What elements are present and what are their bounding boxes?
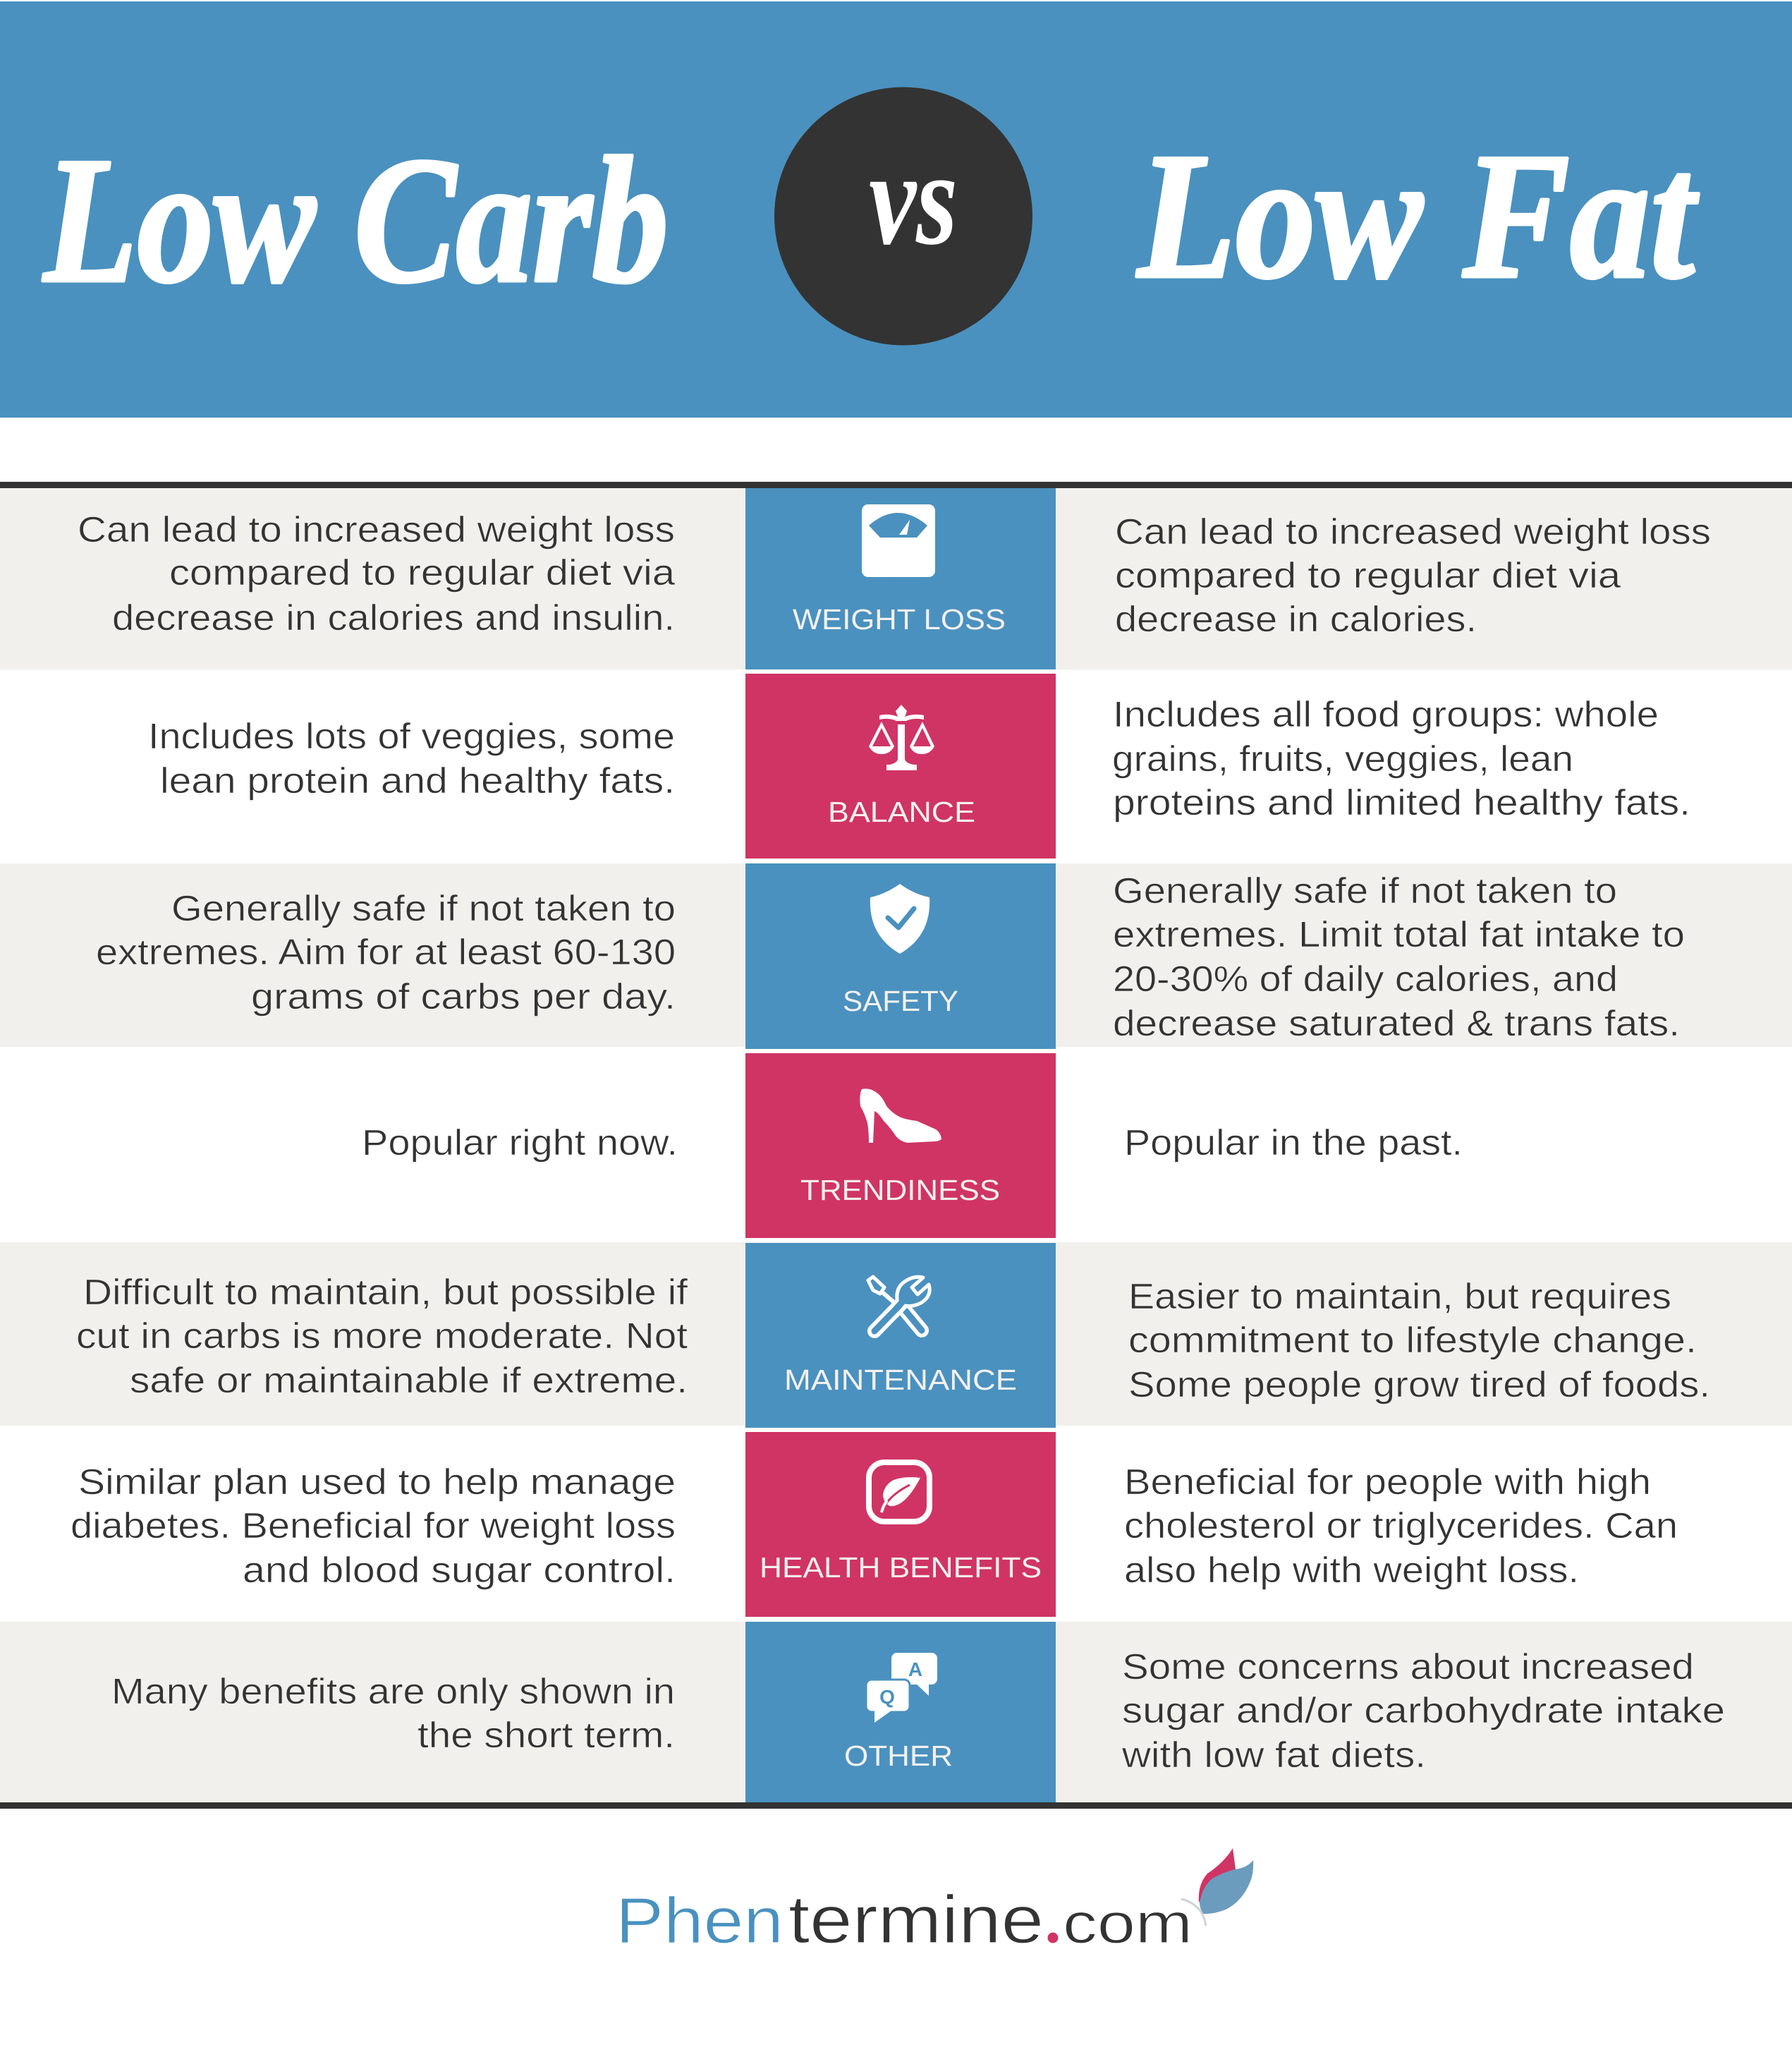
- header banner: [0, 1, 1792, 418]
- logo wordmark: [616, 1882, 1193, 1958]
- label: weight loss: WEIGHT LOSS: [793, 603, 1006, 636]
- low carb text: safety: extremes. Aim for at least 60-130: [96, 932, 676, 972]
- low carb text: weight loss: Can lead to increased weight loss: [78, 509, 675, 550]
- low fat text: maintenance: commitment to lifestyle change.: [1128, 1320, 1697, 1360]
- low carb text: health benefits: diabetes. Beneficial for weight loss: [71, 1505, 676, 1546]
- low fat text: other: [1121, 1646, 1725, 1775]
- low fat text: weight loss: Can lead to increased weight loss: [1115, 511, 1711, 552]
- low carb text: safety: grams of carbs per day.: [251, 976, 676, 1017]
- icon: question and answer bubbles: [866, 1653, 937, 1723]
- label: trendiness: TRENDINESS: [800, 1174, 1000, 1206]
- low carb text: balance: lean protein and healthy fats.: [160, 760, 675, 801]
- category tile: trendiness: [745, 1053, 1056, 1238]
- label: balance: BALANCE: [828, 796, 975, 828]
- low fat text: trendiness: Popular in the past.: [1124, 1122, 1463, 1163]
- category tile: weight loss: [745, 488, 1056, 669]
- logo wordmark: com: [1063, 1892, 1193, 1955]
- low carb text: weight loss: decrease in calories and insulin.: [112, 597, 675, 638]
- low carb text: weight loss: [78, 509, 676, 638]
- low fat text: safety: decrease saturated & trans fats.: [1113, 1003, 1680, 1043]
- vs badge: vs: [869, 125, 958, 273]
- label: health benefits: HEALTH BENEFITS: [760, 1551, 1042, 1584]
- low carb text: safety: [96, 888, 676, 1017]
- icon: leaf in rounded square: [869, 1462, 929, 1522]
- title: Low Carb: Low Carb: [42, 121, 669, 320]
- category tile: balance: [745, 674, 1056, 858]
- low fat text: balance: Includes all food groups: whole: [1113, 694, 1659, 734]
- icon: wrench and screwdriver: [868, 1277, 929, 1331]
- low fat text: safety: 20-30% of daily calories, and: [1113, 959, 1618, 999]
- row: safety: [0, 863, 1792, 1049]
- logo wordmark: Phen: [616, 1885, 784, 1957]
- logo butterfly: [1181, 1848, 1253, 1926]
- low carb text: balance: [148, 716, 675, 801]
- row: weight loss: [0, 488, 1792, 669]
- low fat text: health benefits: also help with weight loss.: [1124, 1550, 1579, 1590]
- category tile: other: [745, 1622, 1056, 1802]
- low carb text: health benefits: and blood sugar control.: [243, 1550, 676, 1590]
- row: trendiness: [362, 1053, 1463, 1238]
- low fat text: maintenance: Easier to maintain, but requires: [1128, 1276, 1671, 1316]
- low fat text: safety: Generally safe if not taken to: [1113, 870, 1617, 911]
- low fat text: balance: proteins and limited healthy fats.: [1113, 782, 1690, 823]
- vs badge: [774, 87, 1032, 346]
- low carb text: safety: Generally safe if not taken to: [171, 888, 676, 928]
- low fat text: other: Some concerns about increased: [1122, 1646, 1694, 1687]
- low fat text: safety: [1113, 870, 1685, 1043]
- category tile: maintenance: [745, 1243, 1056, 1428]
- label: safety: SAFETY: [843, 985, 958, 1017]
- icon: shield with check: [870, 884, 929, 954]
- icon: balance scales: [869, 705, 934, 770]
- top rule: [0, 482, 1792, 488]
- low carb text: other: [111, 1671, 675, 1755]
- low carb text: health benefits: [71, 1462, 676, 1590]
- low carb text: maintenance: [76, 1272, 688, 1400]
- row: balance: [148, 674, 1690, 858]
- icon: high heel shoe: [860, 1088, 941, 1143]
- title: Low Fat: Low Fat: [1136, 116, 1699, 316]
- low fat text: balance: grains, fruits, veggies, lean: [1112, 739, 1573, 779]
- low carb text: maintenance: Difficult to maintain, but possible if: [83, 1272, 688, 1312]
- label: maintenance: MAINTENANCE: [784, 1364, 1017, 1396]
- low carb text: weight loss: compared to regular diet via: [169, 552, 676, 593]
- category tile: safety: [745, 863, 1056, 1049]
- low fat text: weight loss: compared to regular diet via: [1115, 555, 1621, 595]
- logo: Phentermine.com: [616, 1848, 1253, 1958]
- bottom rule: [0, 1802, 1792, 1809]
- row: health benefits: [71, 1432, 1678, 1617]
- low fat text: balance: [1112, 694, 1690, 823]
- low fat text: weight loss: [1115, 511, 1711, 639]
- low carb text: maintenance: cut in carbs is more moderate. Not: [76, 1316, 688, 1356]
- low fat text: safety: extremes. Limit total fat intake to: [1113, 914, 1685, 954]
- low fat text: health benefits: cholesterol or triglycerides. Can: [1124, 1505, 1678, 1546]
- row: maintenance: [0, 1242, 1792, 1428]
- low fat text: other: with low fat diets.: [1121, 1735, 1426, 1775]
- low fat text: weight loss: decrease in calories.: [1115, 599, 1477, 639]
- icon: question and answer bubbles: Q: [879, 1686, 895, 1708]
- row: other: [0, 1622, 1792, 1802]
- low carb text: maintenance: safe or maintainable if extreme.: [130, 1360, 688, 1400]
- logo wordmark: termine: [788, 1882, 1044, 1958]
- low fat text: maintenance: [1128, 1276, 1710, 1404]
- icon: bathroom scale: [862, 504, 935, 577]
- icon: question and answer bubbles: A: [908, 1658, 922, 1680]
- low fat text: health benefits: Beneficial for people with high: [1124, 1462, 1651, 1502]
- low carb text: trendiness: Popular right now.: [362, 1122, 678, 1163]
- category tile: health benefits: [745, 1432, 1056, 1617]
- low fat text: maintenance: Some people grow tired of foods.: [1128, 1364, 1710, 1404]
- low carb text: other: the short term.: [417, 1715, 675, 1755]
- low carb text: health benefits: Similar plan used to help manage: [78, 1462, 676, 1502]
- label: other: OTHER: [844, 1740, 953, 1772]
- low fat text: other: sugar and/or carbohydrate intake: [1122, 1690, 1725, 1730]
- low carb text: other: Many benefits are only shown in: [111, 1671, 675, 1711]
- low carb text: balance: Includes lots of veggies, some: [148, 716, 675, 756]
- low fat text: health benefits: [1124, 1462, 1678, 1590]
